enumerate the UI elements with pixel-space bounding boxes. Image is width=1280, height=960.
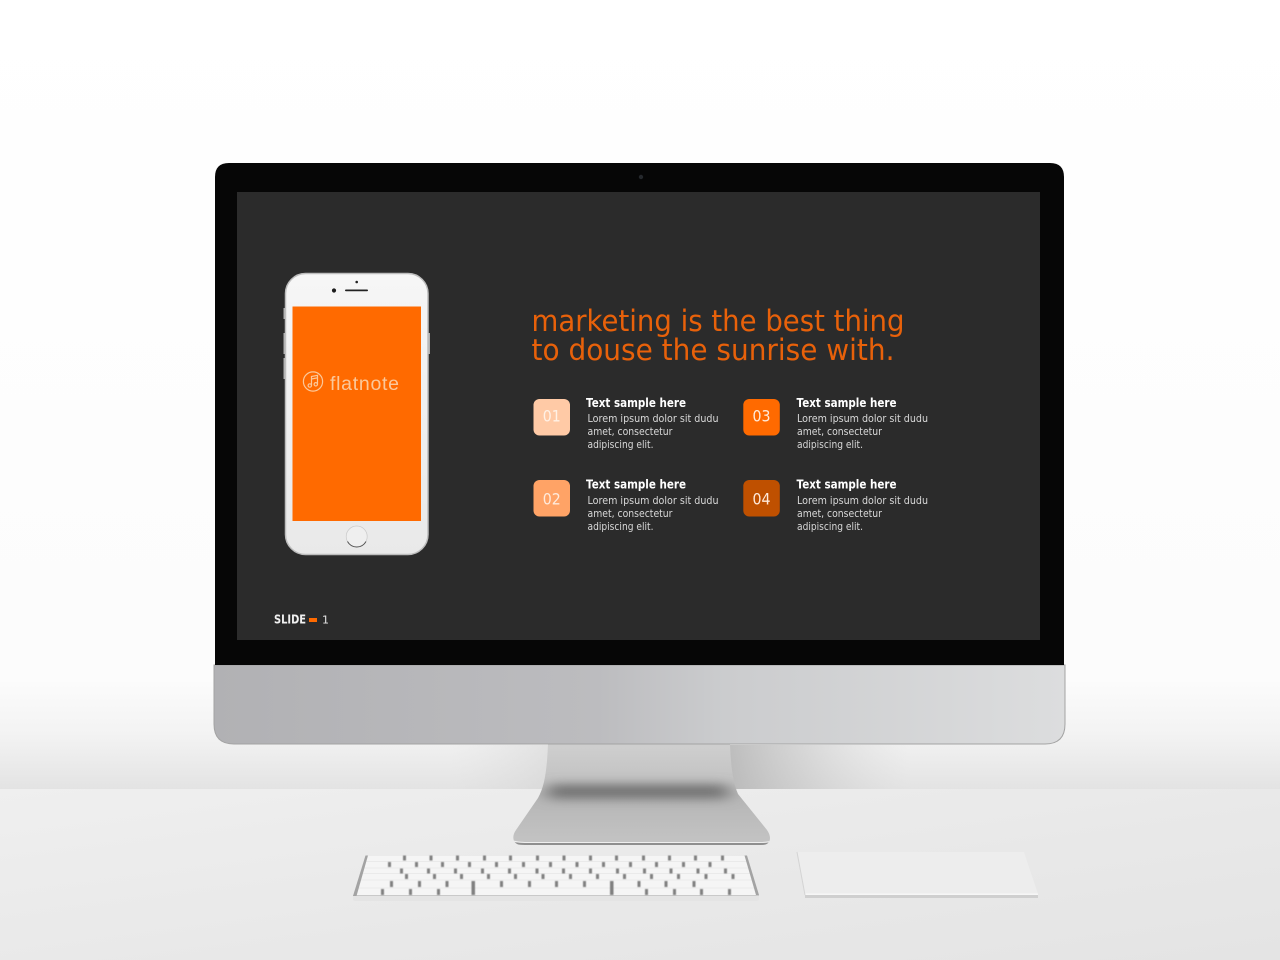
phone body <box>286 274 428 554</box>
body 04: adipiscing elit. <box>797 520 863 533</box>
body 02: Lorem ipsum dolor sit dudu <box>588 494 718 507</box>
keyboard side edges <box>353 856 368 896</box>
body 03: amet, consectetur <box>797 425 882 438</box>
body 03: Lorem ipsum dolor sit dudu <box>797 412 928 425</box>
title <box>532 304 904 367</box>
body 01 <box>588 412 718 451</box>
phone earpiece and camera <box>332 281 368 293</box>
badge 02 <box>534 480 570 516</box>
body 02: adipiscing elit. <box>588 520 654 533</box>
heading 01: Text sample here <box>586 395 686 410</box>
title: marketing is the best thing <box>532 304 904 338</box>
body 03: adipiscing elit. <box>797 438 863 451</box>
phone home button <box>346 526 367 547</box>
monitor bezel <box>215 163 1064 665</box>
monitor stand <box>505 744 780 845</box>
body 01: adipiscing elit. <box>588 438 654 451</box>
item 02: 02 <box>543 490 561 508</box>
heading 02: Text sample here <box>586 476 686 492</box>
body 04: Lorem ipsum dolor sit dudu <box>797 494 928 507</box>
badge 04 <box>743 480 780 516</box>
slide number footer: 1 <box>322 614 329 626</box>
item 04 <box>743 476 928 533</box>
body 02 <box>588 494 718 533</box>
title: to douse the sunrise with. <box>532 333 894 367</box>
slide number footer: SLIDE <box>274 612 306 626</box>
item 03: 03 <box>752 407 770 426</box>
monitor <box>214 163 1065 744</box>
phone mockup <box>284 274 430 554</box>
item 02 <box>534 476 718 533</box>
heading 03: Text sample here <box>796 395 896 410</box>
badge 03 <box>743 399 780 436</box>
body 04: amet, consectetur <box>797 507 882 520</box>
flatnote wordmark: flatnote <box>330 373 399 395</box>
item 01: 01 <box>543 407 561 426</box>
body 04 <box>797 494 928 533</box>
item 04: 04 <box>752 490 770 508</box>
body 01: amet, consectetur <box>588 425 673 438</box>
heading 04: Text sample here <box>796 476 896 492</box>
body 02: amet, consectetur <box>588 507 673 520</box>
trackpad <box>797 852 1038 898</box>
body 01: Lorem ipsum dolor sit dudu <box>588 412 718 425</box>
slide screen <box>237 192 1040 640</box>
keyboard <box>353 856 759 901</box>
phone side buttons <box>284 308 430 379</box>
item 01 <box>534 395 718 451</box>
webcam <box>639 175 643 179</box>
keyboard row lines <box>358 862 755 888</box>
badge 01 <box>534 399 570 436</box>
phone screen <box>292 306 421 521</box>
body 03 <box>797 412 928 451</box>
flatnote logo icon <box>303 372 323 391</box>
monitor chin <box>214 665 1065 744</box>
item 03 <box>743 395 928 451</box>
keyboard key gaps <box>381 856 734 895</box>
